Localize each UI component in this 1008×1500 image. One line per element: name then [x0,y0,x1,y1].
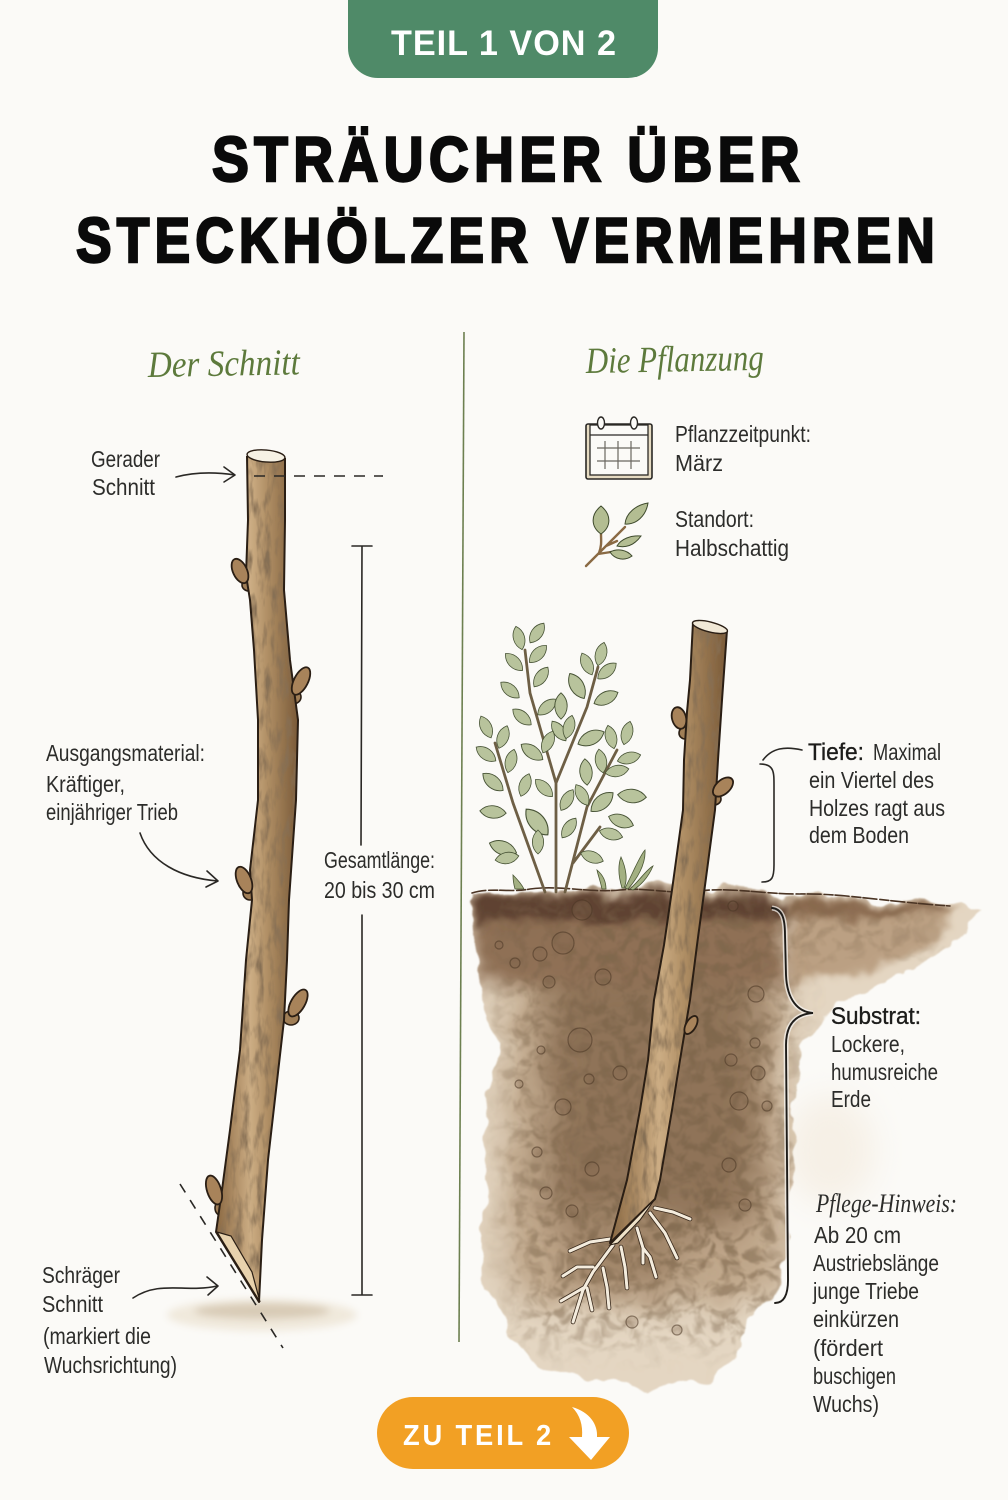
text: Standort: Standort: [675,506,754,532]
arrow: Gerader Schnitt [176,467,235,482]
label: Gesamtlänge [324,847,435,903]
text: Substrat: Substrat: [831,1003,921,1030]
label: Ausgangsmaterial: Kräftiger, [46,771,125,797]
bud collars [679,727,721,805]
text: Tiefe [808,739,945,848]
panel: Der Schnitt [42,342,435,1378]
bud middle [709,774,737,800]
label: Gerader Schnitt [91,446,160,500]
icon: leafy twig [586,503,648,566]
text: Tiefe: Holzes ragt aus [809,795,945,821]
text: Pflege-Hinweis: einkürzen [813,1306,899,1332]
illustration: soil cross-section [460,880,990,1390]
roots [561,1208,690,1322]
text: Substrat: Lockere, [831,1031,905,1057]
label: Schräger Schnitt: Wuchsrichtung) [44,1352,177,1378]
soil surface line [472,888,950,906]
bud 5 [203,1174,225,1206]
text: Pflege-Hinweis: buschigen [813,1363,896,1389]
bud upper [669,706,689,730]
dashed line: straight cut [254,475,383,477]
text: Tiefe: ein Viertel des [809,767,934,793]
bud 1 [228,556,252,586]
bud 4 [284,987,312,1019]
illustration: shrub [473,620,653,892]
icon: calendar [586,417,652,479]
bud collars [215,579,301,1216]
heading: Der Schnitt: Der Schnitt [147,342,302,386]
illustration: ground patch [167,1299,357,1331]
title: STRÄUCHER ÜBER [212,125,805,195]
panel: Die Pflanzung [460,338,990,1417]
text: Substrat: humusreiche [831,1059,938,1085]
label: Schräger Schnitt: Schräger [42,1262,120,1288]
text: Pflanzzeitpunkt: Pflanzzeitpunkt: [675,421,811,447]
text: Pflege-Hinweis [812,1189,957,1417]
text: Pflege-Hinweis: Austriebslänge [813,1250,939,1276]
label: Schräger Schnitt: Schnitt [42,1291,104,1317]
bud 2 [288,664,314,698]
label: Gesamtlänge: 20 bis 30 cm [324,877,435,903]
light wash right of brace [785,1095,875,1205]
bud in soil [682,1014,700,1036]
text: Pflege-Hinweis: Pflege-Hinweis: [815,1189,957,1218]
dashed line: slanted cut [180,1184,283,1348]
label: Gesamtlänge: Gesamtlänge: [324,847,435,873]
label: Gerader Schnitt: Schnitt [92,474,156,500]
text: Pflege-Hinweis: junge Triebe [812,1278,919,1304]
label: Ausgangsmaterial: Ausgangsmaterial: [46,740,205,766]
text: Pflanzzeitpunkt [675,421,811,476]
label: Schräger Schnitt [42,1262,177,1378]
button: Zu Teil 2 [377,1397,629,1469]
text: Pflege-Hinweis: Ab 20 cm [814,1222,901,1248]
arrow: Ausgangsmaterial [140,833,218,887]
label: Ausgangsmaterial [46,740,205,825]
bracket: Substrat [772,908,813,1303]
divider line [459,332,464,1342]
shrub stems [495,650,617,892]
header badge: Teil 1 von 2 [348,0,658,78]
shrub leaves [473,620,647,866]
icon: curved arrow [569,1407,610,1460]
text: Substrat [831,1003,938,1112]
title [76,125,940,276]
text: Pflege-Hinweis: Wuchs) [813,1391,879,1417]
bud 3 [232,864,256,896]
header badge: Teil 1 von 2: TEIL 1 VON 2 [391,24,617,63]
label: Ausgangsmaterial: einjähriger Trieb [46,799,178,825]
text: Tiefe: Maximal [873,739,941,765]
bracket: Tiefe [760,748,802,882]
button: Zu Teil 2: ZU TEIL 2 [403,1420,554,1452]
heading: Die Pflanzung: Die Pflanzung [585,338,764,382]
illustration: planted cutting [561,618,737,1322]
label: Gerader Schnitt: Gerader [91,446,160,472]
text: Standort: Halbschattig [675,535,789,561]
label: Schräger Schnitt: (markiert die [43,1323,151,1349]
pebbles [495,900,772,1335]
text: Tiefe: dem Boden [809,822,909,848]
text: Substrat: Erde [831,1086,871,1112]
dimension line: Gesamtlänge [324,546,435,1295]
illustration: cutting left [203,448,314,1302]
text: Pflanzzeitpunkt: März [675,450,723,476]
text: Standort [675,506,789,561]
grass tufts [513,850,653,890]
text: Tiefe: Tiefe: [808,739,864,766]
text: Pflege-Hinweis: (fördert [813,1335,884,1361]
arrow: Schräger Schnitt [133,1277,218,1298]
